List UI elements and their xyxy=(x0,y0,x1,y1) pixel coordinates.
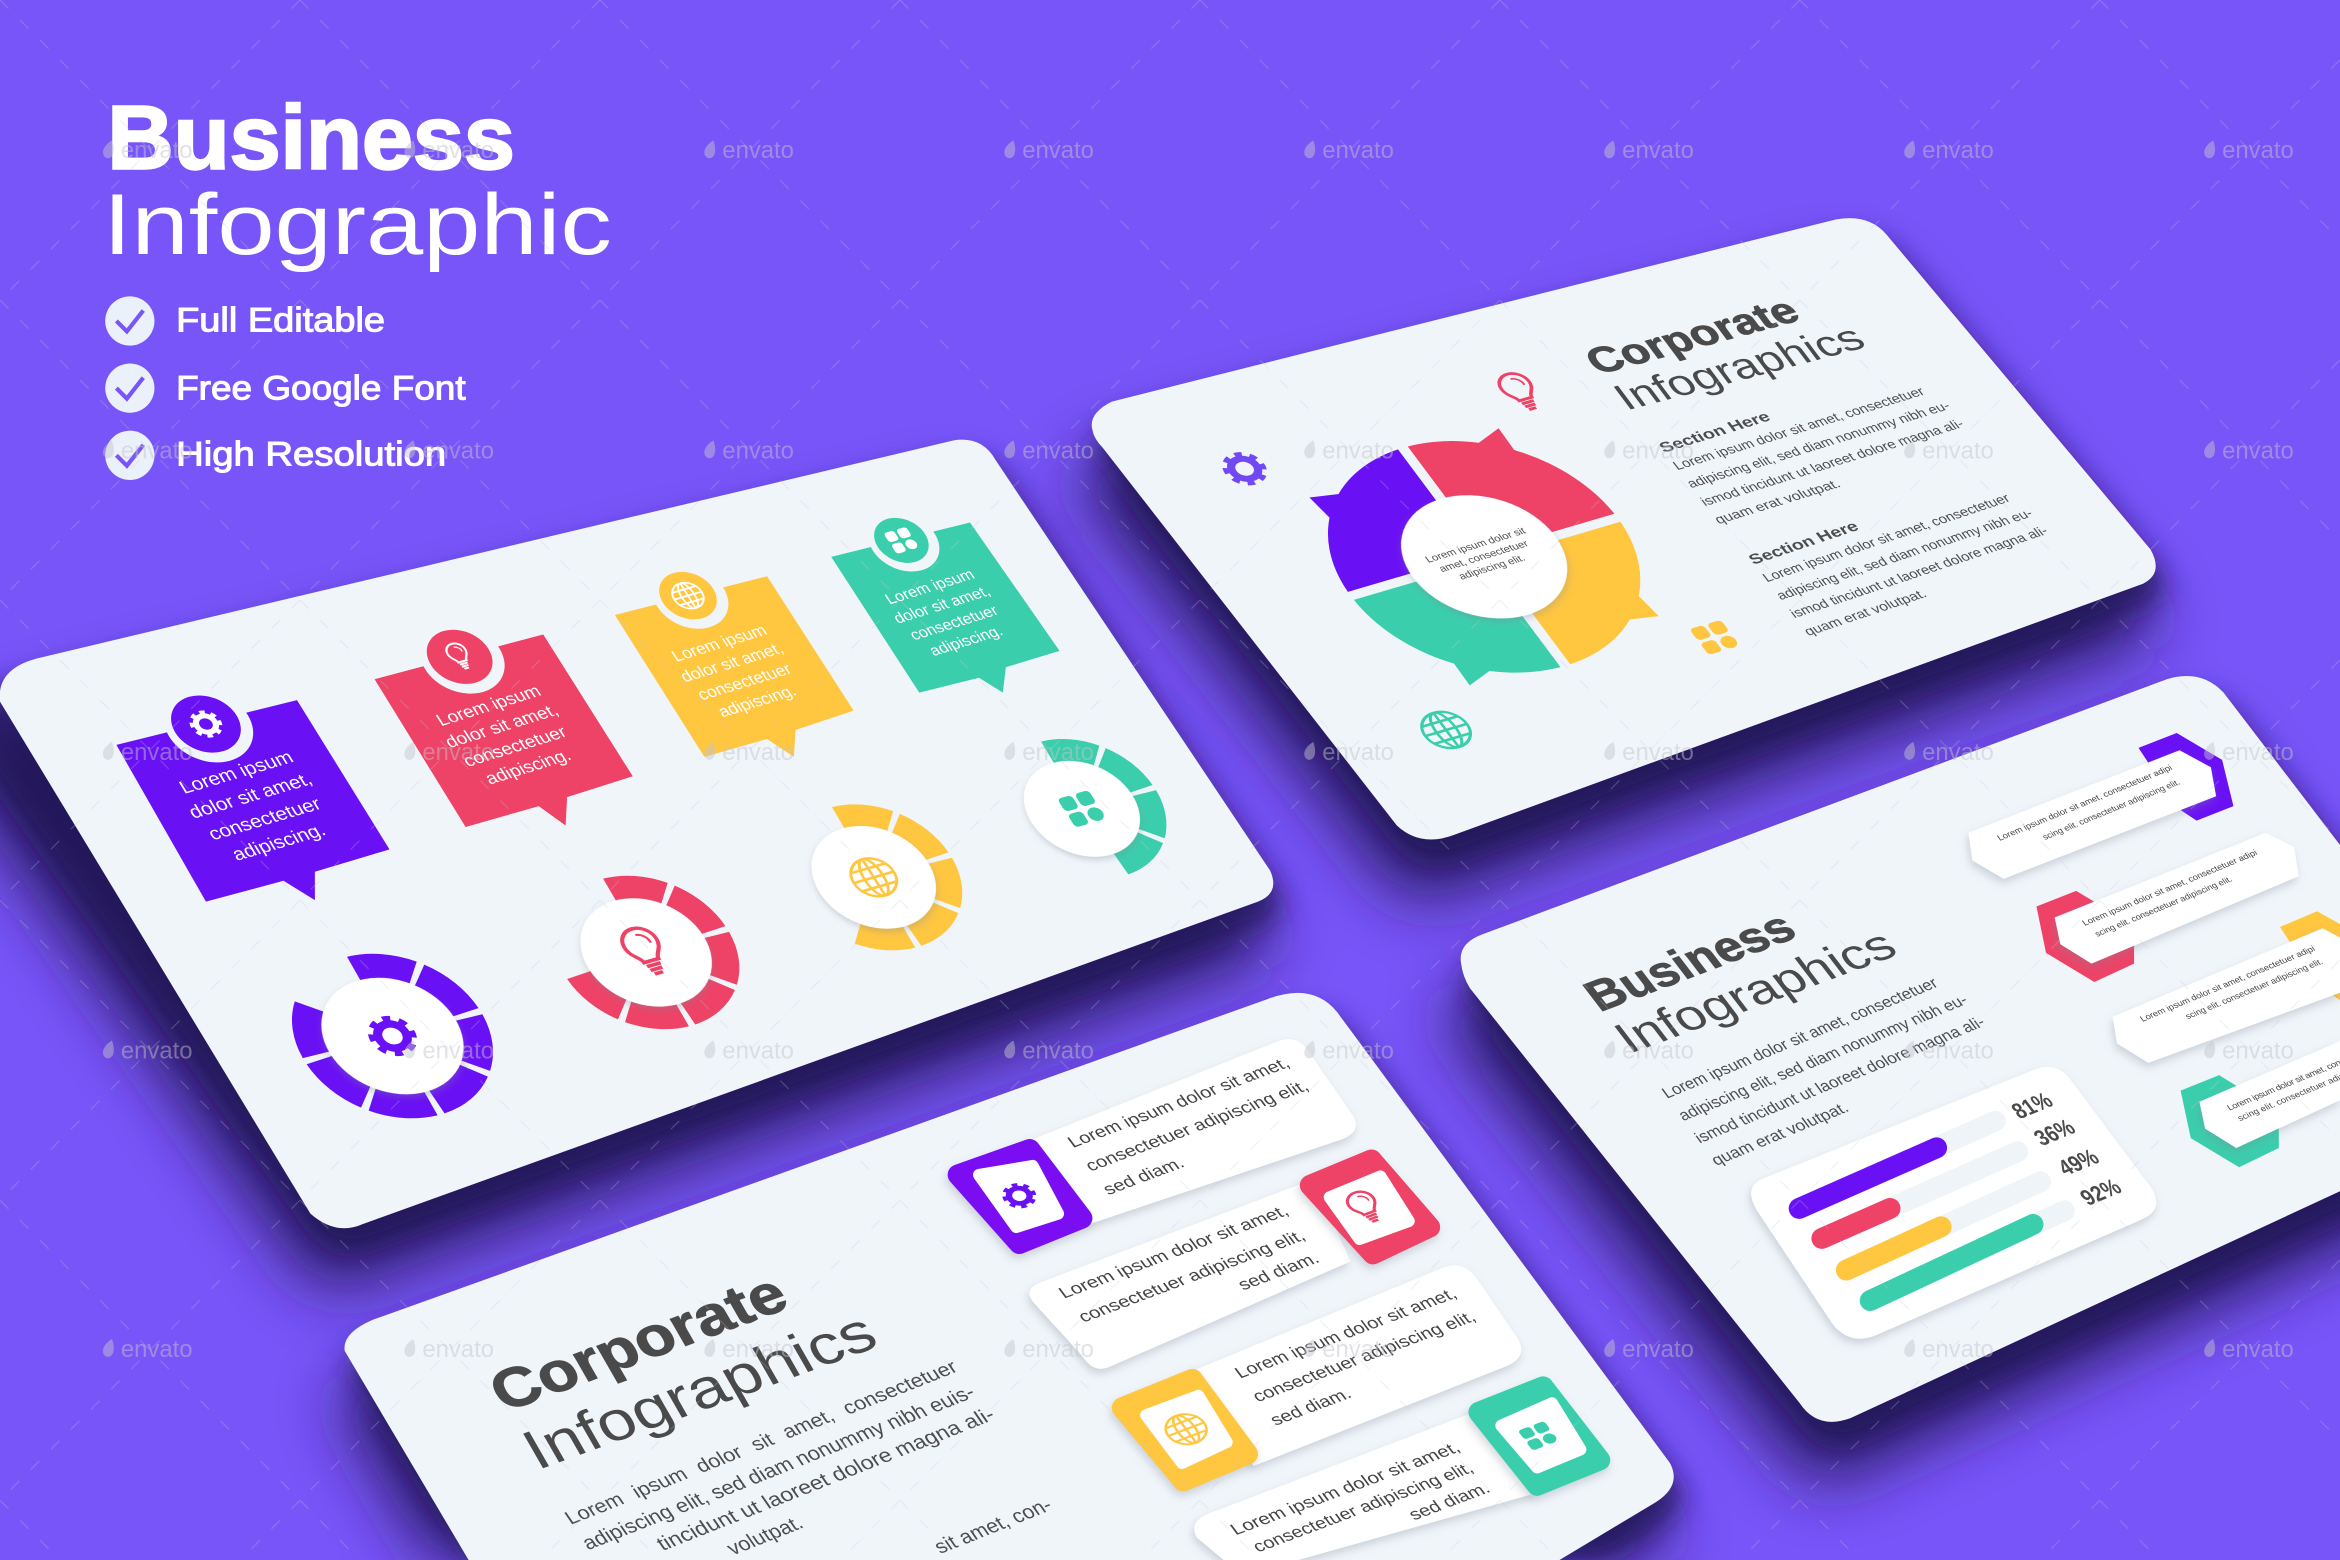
callout: yellow xyxy=(615,558,854,757)
cycle segment: purple xyxy=(1270,449,1476,592)
cycle diagram xyxy=(1270,409,1699,705)
dial: yellow xyxy=(770,798,978,956)
icon: bulb xyxy=(1493,370,1546,413)
text block: sit amet, con- xyxy=(930,1494,1057,1558)
bar: purple 81% xyxy=(1799,1121,1995,1208)
heading: Corporate xyxy=(1576,289,1808,382)
text block: section two: Section Here xyxy=(1745,518,1862,568)
list card: red: consectetuer adipiscing elit, xyxy=(1074,1226,1309,1326)
watermarks: envato xyxy=(422,137,494,164)
bar: green 92% xyxy=(1870,1211,2064,1301)
callout: red: adipiscing. xyxy=(481,745,575,788)
watermarks: envato xyxy=(1022,437,1094,464)
watermarks: envato xyxy=(1322,1037,1394,1064)
feature: full editable xyxy=(105,296,385,346)
text block: tincidunt ut laoreet dolore magna ali- xyxy=(652,1403,999,1555)
callout: purple xyxy=(116,680,390,902)
callout: purple: adipiscing. xyxy=(228,820,330,865)
bar values: 49% xyxy=(2053,1145,2104,1181)
bar: yellow 49% xyxy=(1846,1182,2040,1270)
text block: section one: ismod tincidunt ut laoreet dolore magna ali- xyxy=(1698,417,1967,509)
feature: free google font xyxy=(105,364,466,413)
text block: section one: quam erat volutpat. xyxy=(1712,477,1844,527)
list card: yellow: sed diam. xyxy=(1266,1384,1355,1429)
watermarks: envato xyxy=(722,137,794,164)
list card: yellow: Lorem ipsum dolor sit amet, xyxy=(1231,1284,1460,1382)
list card: green: consectetuer adipiscing elit, xyxy=(1248,1458,1477,1556)
callout: red: consectetuer xyxy=(459,722,570,770)
cycle centre text: adipiscing elit. xyxy=(1456,553,1528,582)
text block: section one xyxy=(1655,362,1981,527)
text block xyxy=(1658,968,2005,1169)
list card: red xyxy=(1029,1160,1430,1369)
hex label: purple: scing elit. consectetuer adipiscing elit. xyxy=(2040,778,2182,842)
watermarks: envato xyxy=(1922,137,1994,164)
watermarks: envato xyxy=(121,137,193,164)
bar: red 36% xyxy=(1822,1152,2018,1238)
feature: full editable: Full Editable xyxy=(176,301,385,339)
panel: corporate infographics list xyxy=(344,993,1674,1560)
watermarks: envato xyxy=(121,437,193,464)
hex label: purple xyxy=(1968,733,2233,879)
icon: globe xyxy=(1413,707,1480,753)
watermarks: envato xyxy=(722,437,794,464)
watermarks: envato xyxy=(722,1037,794,1064)
list card: red: Lorem ipsum dolor sit amet, xyxy=(1054,1201,1292,1302)
text block: section two: ismod tincidunt ut laoreet dolore magna ali- xyxy=(1788,524,2051,621)
text block: section two: quam erat volutpat. xyxy=(1801,587,1930,639)
watermarks: envato xyxy=(1322,437,1394,464)
watermarks: envato xyxy=(1622,1037,1694,1064)
list card: green xyxy=(1194,1387,1600,1560)
list card: purple: sed diam. xyxy=(1099,1153,1188,1198)
watermarks: envato xyxy=(2222,437,2294,464)
callout: yellow: adipiscing. xyxy=(714,682,800,721)
icon: gear xyxy=(1218,450,1272,487)
watermarks: envato xyxy=(2222,739,2294,766)
cycle segment: yellow xyxy=(1492,522,1699,664)
list card: purple xyxy=(958,1039,1356,1244)
watermarks: envato xyxy=(422,1336,494,1363)
text block: section one: Section Here xyxy=(1655,409,1774,456)
hex label: purple: Lorem ipsum dolor sit amet, consectetuer adipi xyxy=(1995,763,2174,842)
watermarks: envato xyxy=(722,1336,794,1363)
watermarks: envato xyxy=(1322,739,1394,766)
watermarks: envato xyxy=(1922,1336,1994,1363)
watermarks: envato xyxy=(2222,1336,2294,1363)
hex label: red xyxy=(2036,833,2299,982)
watermarks: envato xyxy=(1922,1037,1994,1064)
text block: section two xyxy=(1745,469,2065,639)
watermarks: envato xyxy=(1022,137,1094,164)
dial: red xyxy=(536,868,757,1036)
watermarks: envato xyxy=(722,739,794,766)
title: Infographic xyxy=(103,177,612,273)
callout: purple: dolor sit amet, xyxy=(185,769,316,823)
text block: ismod tincidunt ut laoreet dolore magna ali- xyxy=(1691,1013,1989,1147)
watermarks: envato xyxy=(1622,137,1694,164)
title xyxy=(103,88,612,273)
hex label: yellow: scing elit. consectetuer adipiscing elit. xyxy=(2183,957,2325,1021)
watermarks: envato xyxy=(1022,739,1094,766)
watermarks: envato xyxy=(1922,739,1994,766)
feature: free google font: Free Google Font xyxy=(176,369,466,407)
watermarks: envato xyxy=(1622,1336,1694,1363)
watermarks: envato xyxy=(1322,137,1394,164)
list card: yellow xyxy=(1122,1265,1521,1481)
callout: green: dolor sit amet, xyxy=(891,584,994,627)
callout: purple: consectetuer xyxy=(204,794,326,845)
panel: corporate infographics cycle diagram xyxy=(1092,218,2156,840)
callout: red: dolor sit amet, xyxy=(441,700,562,751)
watermarks: envato xyxy=(1922,437,1994,464)
watermarks: envato xyxy=(121,1336,193,1363)
dial: green xyxy=(982,733,1182,884)
heading: Infographics xyxy=(1604,316,1874,418)
watermarks: envato xyxy=(2222,1037,2294,1064)
watermarks: envato xyxy=(1622,739,1694,766)
bar values: 92% xyxy=(2076,1175,2127,1211)
heading: Infographics xyxy=(511,1300,887,1481)
callout: green: adipiscing. xyxy=(926,623,1006,660)
callout: green: consectetuer xyxy=(907,603,1002,644)
watermarks: envato xyxy=(2222,137,2294,164)
callout: red: Lorem ipsum xyxy=(432,681,544,730)
feature: high resolution xyxy=(105,431,446,480)
callout: yellow: consectetuer xyxy=(694,660,796,704)
text block: adipiscing elit, sed diam nonummy nibh eu- xyxy=(1675,991,1971,1124)
cycle centre text: Lorem ipsum dolor sit xyxy=(1423,526,1528,565)
list card: purple: consectetuer adipiscing elit, xyxy=(1081,1077,1312,1175)
bar values: 36% xyxy=(2029,1115,2081,1151)
panel: business infographics xyxy=(1461,676,2340,1422)
callout: yellow: dolor sit amet, xyxy=(677,639,787,686)
watermarks: envato xyxy=(422,739,494,766)
bar values xyxy=(2007,1089,2127,1211)
heading: Business xyxy=(1574,903,1806,1021)
text block: section one: Lorem ipsum dolor sit amet, consectetuer xyxy=(1671,385,1928,473)
watermarks: envato xyxy=(422,437,494,464)
watermarks xyxy=(103,137,2294,1363)
watermarks: envato xyxy=(1022,1336,1094,1363)
bar values: 81% xyxy=(2007,1089,2058,1124)
feature: high resolution: High Resolution xyxy=(176,436,446,474)
cycle segment: red xyxy=(1408,409,1614,551)
watermarks: envato xyxy=(121,739,193,766)
watermarks: envato xyxy=(422,1037,494,1064)
text block: quam erat volutpat. xyxy=(1707,1099,1852,1169)
hex label: yellow xyxy=(2113,911,2340,1063)
callout: purple: Lorem ipsum xyxy=(176,747,297,798)
hex label: red: Lorem ipsum dolor sit amet, consectetuer adipi xyxy=(2080,848,2259,927)
callout: yellow: Lorem ipsum xyxy=(668,621,770,665)
feature list xyxy=(105,296,466,480)
bar chart card xyxy=(1751,1067,2156,1339)
list card: red: sed diam. xyxy=(1234,1249,1323,1294)
heading: Corporate xyxy=(479,1262,798,1423)
list card: purple: Lorem ipsum dolor sit amet, xyxy=(1063,1053,1293,1151)
hex label: green xyxy=(2181,1041,2340,1167)
watermarks: envato xyxy=(1622,437,1694,464)
heading: Infographics xyxy=(1604,920,1907,1063)
text block: section two: Lorem ipsum dolor sit amet, consectetuer xyxy=(1760,492,2013,585)
icon: grid xyxy=(1689,620,1740,655)
dial: purple xyxy=(274,947,511,1125)
hex label: yellow: Lorem ipsum dolor sit amet, consectetuer adipi xyxy=(2138,944,2317,1023)
text block: section two: adipiscing elit, sed diam nonummy nibh eu- xyxy=(1774,507,2036,603)
list card: green: Lorem ipsum dolor sit amet, xyxy=(1226,1438,1464,1538)
cycle centre text: amet, consectetuer xyxy=(1437,538,1532,575)
watermarks: envato xyxy=(121,1037,193,1064)
heading xyxy=(1576,289,1874,418)
text block: section one: adipiscing elit, sed diam nonummy nibh eu- xyxy=(1684,399,1954,491)
callout: green xyxy=(831,505,1060,693)
callout: red xyxy=(375,615,633,827)
callout: green: Lorem ipsum xyxy=(882,567,978,608)
list card: green: sed diam. xyxy=(1404,1479,1494,1523)
text block: adipiscing elit, sed diam nonummy nibh euis- xyxy=(577,1381,979,1554)
list card: yellow: consectetuer adipiscing elit, xyxy=(1248,1307,1479,1405)
cycle centre text xyxy=(1423,526,1545,587)
text block: Lorem ipsum dolor sit amet, consectetuer xyxy=(561,1356,962,1529)
text block: volutpat. xyxy=(722,1511,808,1560)
panel: callouts and progress dials xyxy=(0,440,1273,1228)
hex label: red: scing elit. consectetuer adipiscing elit. xyxy=(2093,874,2234,938)
watermarks: envato xyxy=(1322,1336,1394,1363)
title: Business xyxy=(107,88,515,188)
cycle segment: green xyxy=(1354,562,1561,705)
text block: Lorem ipsum dolor sit amet, consectetuer xyxy=(1658,974,1942,1102)
watermarks: envato xyxy=(1022,1037,1094,1064)
